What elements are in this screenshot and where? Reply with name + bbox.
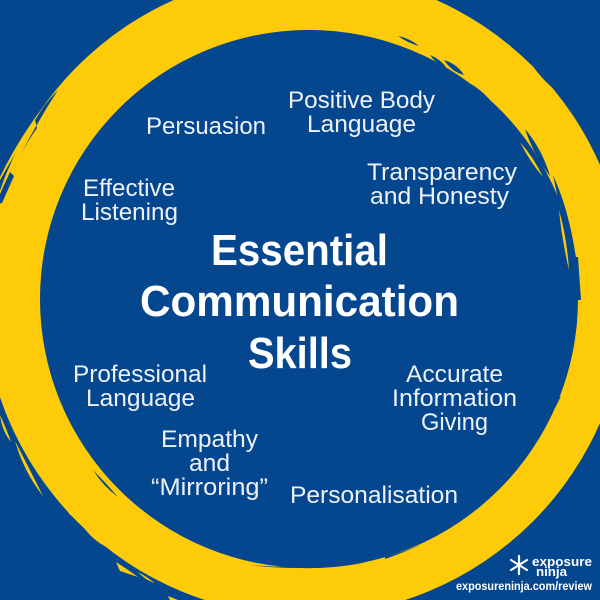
title: Skills [248, 329, 352, 378]
label: accurate information giving: Accurate [406, 361, 503, 388]
logo: exposure ninja: exposure [532, 554, 592, 569]
label: empathy and mirroring [151, 426, 268, 501]
yellow slivers [0, 107, 569, 600]
label: persuasion: Persuasion [146, 113, 266, 140]
label: accurate information giving: Information [392, 385, 517, 412]
label: positive body language: Positive Body [288, 87, 435, 114]
logo: exposure ninja [456, 554, 593, 593]
label: effective listening [81, 175, 178, 226]
title: Essential [211, 226, 388, 275]
label: empathy and mirroring: Empathy [161, 426, 258, 453]
label: accurate information giving [392, 361, 517, 436]
label: effective listening: Effective [83, 175, 175, 202]
title [140, 226, 459, 378]
label: professional language: Professional [73, 361, 207, 388]
label: transparency and honesty: Transparency [367, 159, 517, 186]
label: empathy and mirroring: “Mirroring” [151, 474, 268, 501]
label: empathy and mirroring: and [189, 450, 230, 477]
label: transparency and honesty [367, 159, 517, 210]
icon: ninja star [511, 556, 527, 574]
label: professional language [73, 361, 207, 412]
label: accurate information giving: Giving [421, 409, 488, 436]
label: professional language: Language [86, 385, 195, 412]
label: positive body language: Language [307, 111, 416, 138]
title: Communication [140, 277, 459, 326]
label: transparency and honesty: and Honesty [370, 183, 509, 210]
label: personalisation: Personalisation [290, 482, 458, 509]
label: effective listening: Listening [81, 199, 178, 226]
inner edge thickening at lower left [41, 340, 127, 503]
logo: exposure ninja: ninja [536, 564, 568, 579]
label: positive body language [288, 87, 435, 138]
